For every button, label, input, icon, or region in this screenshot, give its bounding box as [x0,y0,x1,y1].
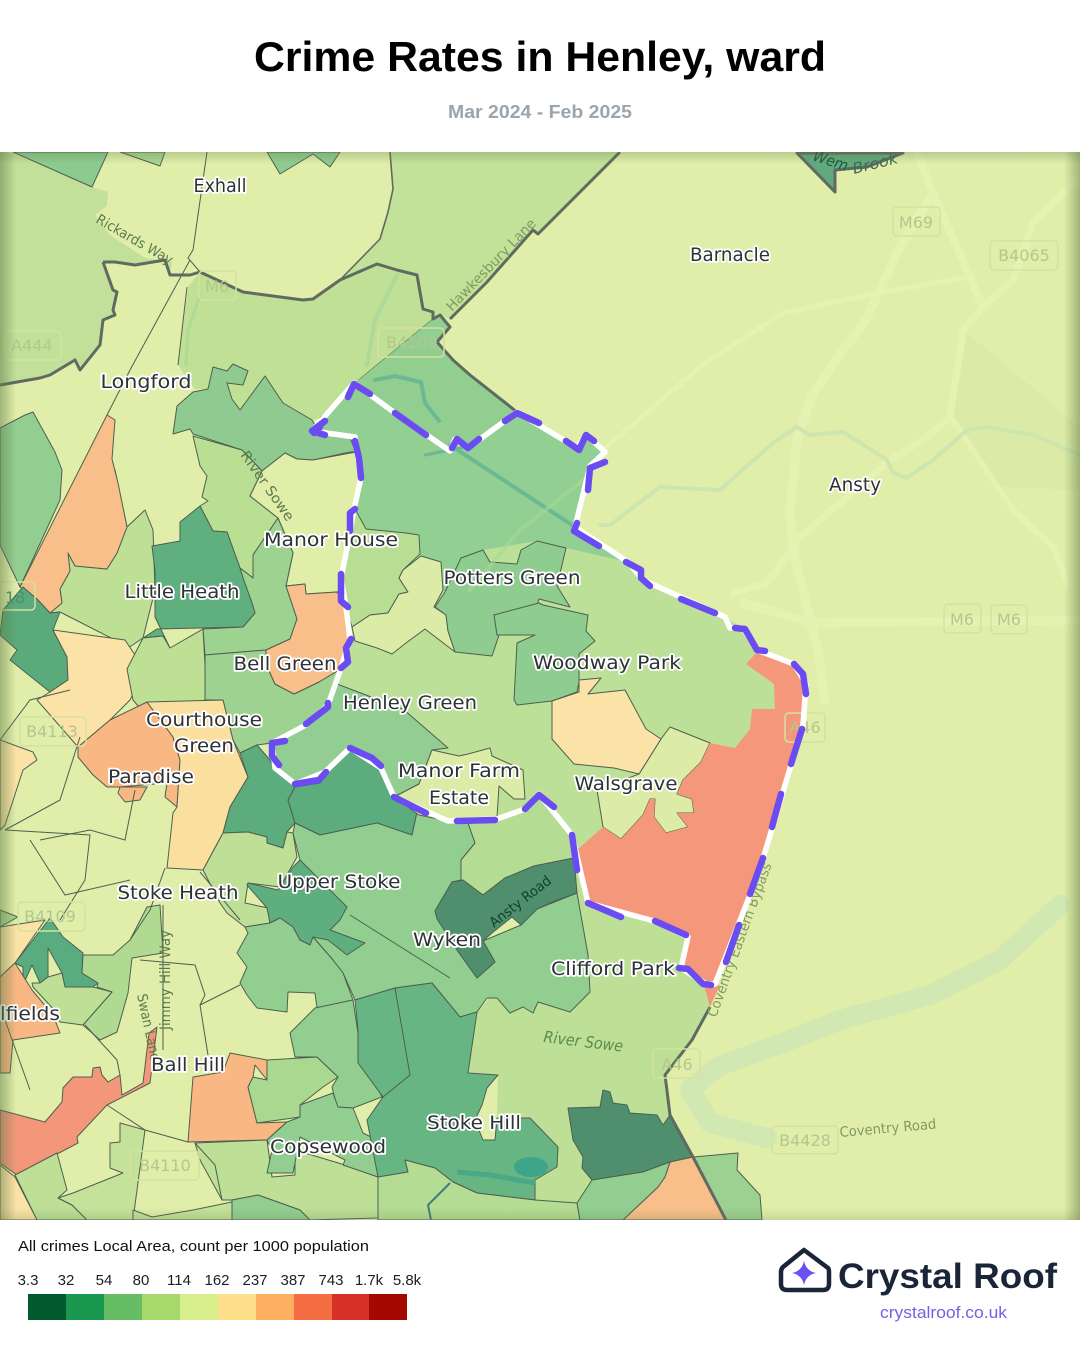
place name labels: Longford [100,371,192,393]
road number shields: B4065 [998,246,1050,265]
road number shields: A46 [789,718,821,737]
legend colour scale [28,1294,407,1320]
place name labels: Manor Farm [398,760,520,782]
place name labels: Stoke Heath [118,882,238,904]
road number shields: B4113 [26,722,78,741]
place name labels: Manor House [264,529,398,551]
legend value labels: 80 [133,1272,149,1289]
place name labels: lfields [0,1003,60,1025]
legend value labels: 54 [96,1272,112,1289]
road number shields: B4109 [386,333,438,352]
street and river names: Swan Lane [133,993,163,1062]
place name labels: Upper Stoke [278,871,400,893]
place name labels: Exhall [194,175,246,197]
ward interior areas [272,315,806,984]
ward boundary: white line with purple dashes [272,383,806,985]
legend value labels: 237 [242,1272,268,1289]
place name labels: Walsgrave [574,773,678,795]
place name labels: Henley Green [343,692,477,714]
road number shields: M69 [899,213,933,232]
road number shields: B4428 [779,1131,831,1150]
place name labels: Copsewood [270,1136,386,1158]
street and river names: Coventry Road [839,1117,937,1141]
extra thin boundaries [0,152,450,1200]
river and rail through ward [186,275,590,590]
street and river names [93,147,937,1141]
map edge vignette [0,152,1080,1220]
street and river names: River Sowe [237,448,297,524]
legend value labels: 3.3 [18,1272,38,1289]
place name labels: Estate [429,787,489,809]
road number shields: A46 [661,1055,693,1074]
road number shields: B4109 [24,907,76,926]
thick district boundaries [0,152,903,1222]
legend value labels: 387 [280,1272,306,1289]
place name labels [0,175,881,1158]
place name labels: Bell Green [234,653,336,675]
legend value labels: 1.7k [355,1272,384,1289]
lake and river in Stoke Hill [428,1157,548,1220]
road number shields: B4110 [139,1156,191,1175]
legend value labels: 743 [318,1272,344,1289]
title: Crime Rates in Henley, ward [254,33,826,80]
website url: crystalroof.co.uk [880,1304,1008,1322]
place name labels: Green [174,735,234,757]
place name labels: Clifford Park [551,958,675,980]
icon: house with star [781,1250,829,1290]
map panel [0,147,1080,1222]
legend [18,1238,422,1320]
place name labels: Wyken [413,929,481,951]
street and river names: Brook [851,149,901,178]
date range subtitle: Mar 2024 - Feb 2025 [448,102,632,122]
legend value labels: 5.8k [393,1272,422,1289]
place name labels: Barnacle [690,244,770,266]
place name labels: Courthouse [146,709,262,731]
place name labels: Stoke Hill [427,1112,521,1134]
legend value labels [18,1272,422,1289]
road number shields: M6 [997,610,1021,629]
legend value labels: 162 [204,1272,230,1289]
street and river names: River Sowe [543,1027,624,1056]
legend heading: All crimes Local Area, count per 1000 population [18,1238,369,1255]
road number shields: M6 [205,277,229,296]
street and river names: Jimmy Hill Way [158,930,174,1031]
place name labels: Paradise [108,766,194,788]
street and river names: Ansty Road [487,873,555,931]
place name labels: Ansty [829,474,881,496]
logo wordmark: Crystal Roof [838,1257,1057,1296]
street and river names: Wem [811,147,851,175]
road number shields [0,207,1058,1180]
street and river names: Rickards Way [93,212,175,268]
street and river names: Coventry Eastern Bypass [705,861,776,1019]
base roads and rivers [598,425,1080,1148]
street and river names: Hawkesbury Lane [443,216,540,315]
place name labels: Ball Hill [151,1054,225,1076]
place name labels: Woodway Park [533,652,681,674]
road number shields: M6 [950,610,974,629]
logo: Crystal Roof [781,1250,1057,1322]
place name labels: Potters Green [444,567,580,589]
choropleth areas [0,152,762,1220]
legend value labels: 32 [58,1272,74,1289]
road number shields: A444 [11,336,53,355]
legend value labels: 114 [167,1272,191,1289]
place name labels: Little Heath [124,581,240,603]
road number shields: 18 [5,588,25,607]
